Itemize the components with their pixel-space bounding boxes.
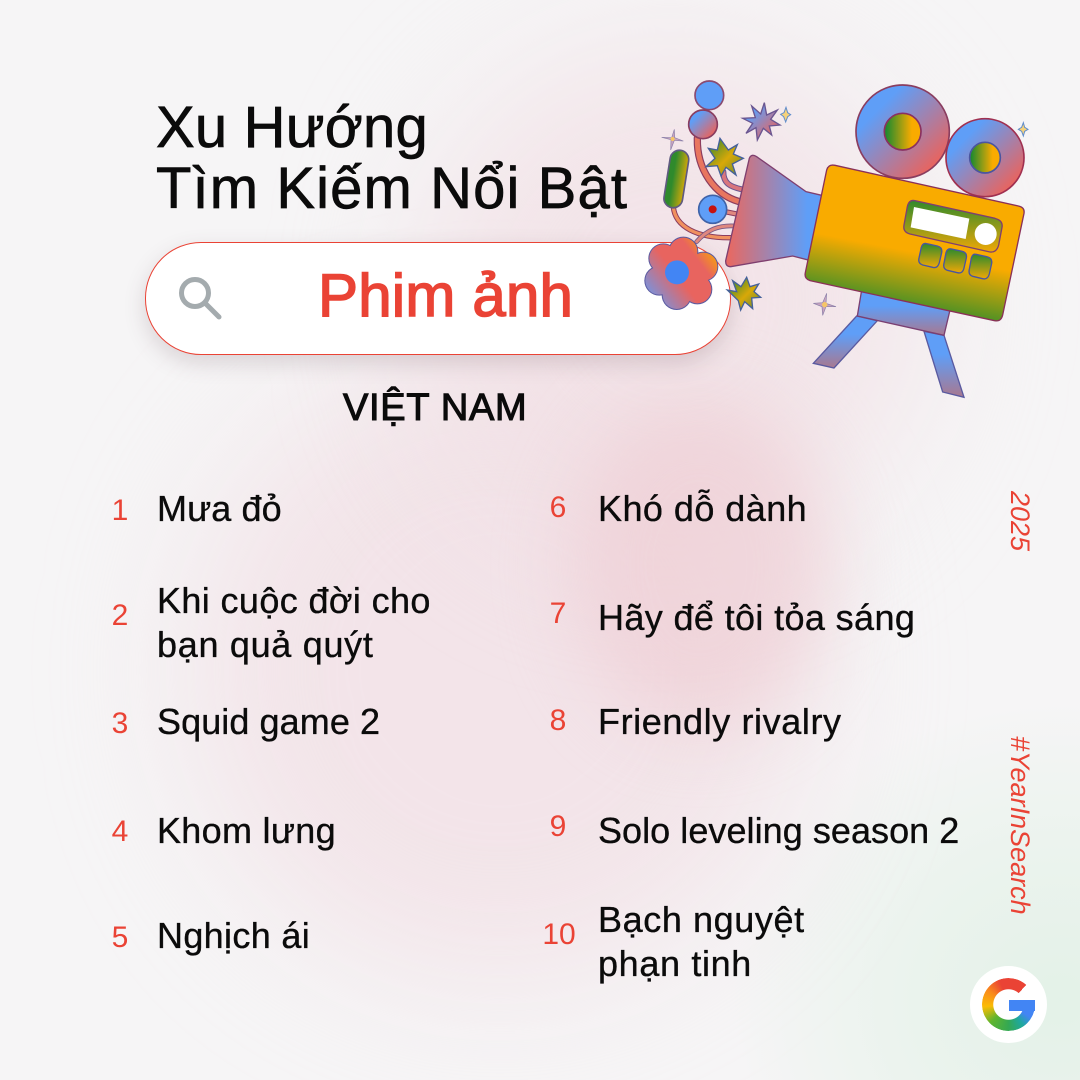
rank 10: 10 xyxy=(542,918,576,951)
control buttons xyxy=(919,243,992,279)
rank 8: Friendly rivalry xyxy=(598,701,842,742)
rank 2 xyxy=(112,580,431,665)
rank 10: Bạch nguyệt xyxy=(598,899,805,940)
illustration: film camera xyxy=(644,80,1029,398)
rank 6: 6 xyxy=(550,491,566,524)
camera body xyxy=(805,165,1024,321)
rank 2: 2 xyxy=(112,599,128,632)
title: Xu Hướng xyxy=(156,95,428,160)
icon: G xyxy=(982,978,1035,1031)
search term: Phim ảnh xyxy=(318,262,573,329)
rank 10 xyxy=(542,899,805,984)
hashtag: #YearInSearch xyxy=(1005,736,1035,915)
year label: 2025 xyxy=(1005,491,1035,551)
rank 2: Khi cuộc đời cho xyxy=(157,580,431,621)
circles on cables xyxy=(689,81,727,223)
rank 9: 9 xyxy=(550,810,566,843)
green capsule xyxy=(663,149,690,209)
rank 1: 1 xyxy=(112,494,128,527)
control panel xyxy=(904,200,1002,252)
reels xyxy=(856,85,1024,197)
rank 4: 4 xyxy=(112,815,128,848)
rank 2: bạn quả quýt xyxy=(157,624,374,665)
stars and sparkles xyxy=(662,103,1028,315)
rank 5: Nghịch ái xyxy=(157,915,310,956)
rank 5: 5 xyxy=(112,921,128,954)
flower xyxy=(644,237,718,310)
title xyxy=(156,95,628,221)
region label: VIỆT NAM xyxy=(343,387,527,429)
search bar xyxy=(145,242,731,355)
google logo xyxy=(970,966,1047,1043)
rank 6: Khó dỗ dành xyxy=(598,488,807,529)
rank 3: Squid game 2 xyxy=(157,701,380,742)
rank 3: 3 xyxy=(112,707,128,740)
icon: magnifier xyxy=(179,277,222,320)
rank 7: 7 xyxy=(550,597,566,630)
ranking list, left column xyxy=(112,488,431,956)
display and button xyxy=(911,207,969,239)
cables xyxy=(673,138,742,242)
rank 9: Solo leveling season 2 xyxy=(598,810,959,851)
tripod xyxy=(813,290,964,397)
rank 8: 8 xyxy=(550,704,566,737)
rank 4: Khom lưng xyxy=(157,810,336,851)
ranking list, right column xyxy=(542,488,959,984)
rank 1: Mưa đỏ xyxy=(157,488,282,529)
rank 7: Hãy để tôi tỏa sáng xyxy=(598,597,915,638)
title: Tìm Kiếm Nổi Bật xyxy=(156,156,628,221)
lens horn xyxy=(726,155,822,267)
rank 10: phạn tinh xyxy=(598,943,752,984)
